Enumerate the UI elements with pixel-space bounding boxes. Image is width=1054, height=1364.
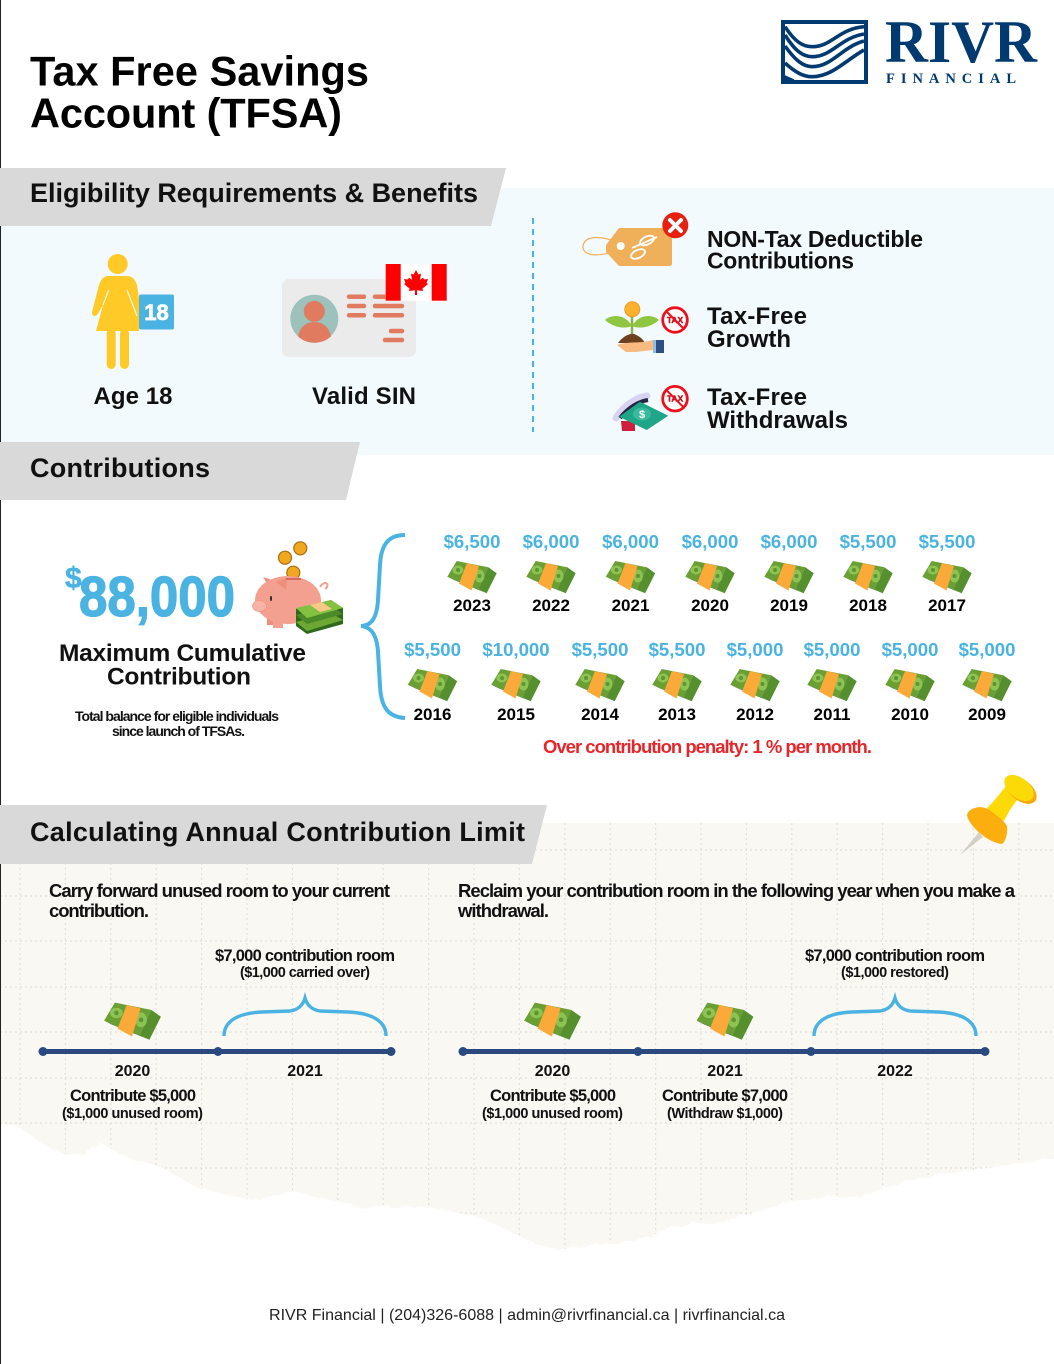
callout: 2021 room (215, 947, 395, 981)
year 2016 (404, 639, 461, 724)
year 2019: $6,000 (761, 531, 817, 552)
stat: 88,000: 88,000 (79, 565, 235, 629)
year 2017: 2017 (928, 596, 966, 615)
left page edge (0, 0, 1, 1364)
logo subtitle: FINANCIAL (886, 71, 1016, 87)
logo: RIVR Financial (783, 9, 1038, 87)
year 2009: 2009 (968, 705, 1006, 724)
timeline labels (62, 1063, 323, 1122)
text: tax-free growth: Growth (707, 326, 791, 353)
text: total balance note: since launch of TFSAs. (112, 723, 245, 739)
year 2013: $5,500 (649, 639, 705, 660)
timeline bar (458, 1047, 990, 1056)
text: maximum cumulative contribution: Maximum Cumulative (59, 640, 306, 667)
timeline labels: Contribute $5,000 (490, 1087, 616, 1105)
icon: ID card with flag (282, 264, 447, 357)
text: tax-free growth (707, 303, 807, 353)
icon: push pin (960, 770, 1042, 855)
callout: 2022 room: ($1,000 restored) (841, 965, 949, 981)
callout: 2022 room: $7,000 contribution room (805, 947, 985, 965)
year 2016: $5,500 (404, 639, 461, 660)
year 2023 (444, 531, 500, 615)
year 2018 (840, 531, 896, 615)
year 2010: 2010 (891, 705, 929, 724)
text: non-tax deductible: NON-Tax Deductible (707, 226, 923, 252)
year 2018: $5,500 (840, 531, 896, 552)
year 2009: $5,000 (959, 639, 1015, 660)
icon: money 2020 (524, 1003, 581, 1040)
text: maximum cumulative contribution: Contribution (107, 664, 251, 690)
heading: calculating annual contribution limit (0, 805, 547, 864)
year 2020 (682, 531, 738, 615)
text: total balance note (75, 708, 279, 739)
year 2010 (882, 639, 938, 724)
timeline: reclaim (458, 947, 990, 1122)
text: tax-free growth: Tax-Free (707, 303, 807, 330)
year 2011: $5,000 (804, 639, 860, 660)
year 2011: 2011 (814, 705, 850, 724)
timeline labels: 2021 (287, 1063, 323, 1080)
icon: money 2020 (104, 1003, 161, 1040)
year 2015 (482, 639, 550, 724)
logo wordmark: RIVR (885, 9, 1038, 75)
footer: RIVR Financial | (204)326-6088 | admin@rivrfinancial.ca | rivrfinancial.ca (269, 1307, 785, 1324)
heading: calculating annual contribution limit: Calculating Annual Contribution Limit (30, 817, 525, 847)
title: Account (TFSA) (30, 90, 342, 136)
year 2014: $5,500 (572, 639, 628, 660)
icon: cash withdrawal (616, 396, 668, 431)
icon: no tax growth (663, 308, 687, 332)
year 2014: 2014 (581, 705, 619, 724)
icon: piggy bank (252, 542, 343, 634)
panel: calculation paper background (0, 823, 1054, 1260)
icon: woman age 18 (92, 254, 174, 369)
year 2017 (919, 531, 975, 615)
timeline labels: (Withdraw $1,000) (667, 1106, 783, 1122)
year 2021: $6,000 (602, 531, 659, 552)
heading: contributions (0, 442, 360, 500)
label: age 18: Age 18 (94, 383, 172, 410)
text: maximum cumulative contribution (59, 640, 306, 690)
callout: 2021 room: $7,000 contribution room (215, 947, 395, 965)
timeline: carry forward (38, 947, 396, 1122)
year 2018: 2018 (849, 596, 887, 615)
year 2022: $6,000 (523, 531, 579, 552)
text: reclaim heading (457, 880, 1016, 921)
brace: 2022 (814, 998, 976, 1036)
year 2015: $10,000 (482, 639, 550, 660)
text: carry forward heading: Carry forward unused room to your current (49, 880, 390, 901)
year 2022: 2022 (532, 596, 570, 615)
panel: eligibility background (0, 188, 1054, 455)
timeline bar (38, 1047, 396, 1056)
year 2012 (727, 639, 783, 724)
timeline labels: ($1,000 unused room) (62, 1106, 203, 1122)
year 2011 (804, 639, 860, 724)
callout: 2021 room: ($1,000 carried over) (240, 965, 370, 981)
year 2020: 2020 (691, 596, 729, 615)
year 2013: 2013 (658, 705, 696, 724)
text: carry forward heading (49, 880, 390, 921)
year 2013 (649, 639, 705, 724)
year 2023: $6,500 (444, 531, 500, 552)
logo mark (783, 22, 866, 82)
row: 2023 to 2017 (444, 531, 975, 615)
icon: no tax withdrawal (663, 386, 687, 411)
text: tax-free withdrawals: Withdrawals (707, 407, 848, 434)
text: reclaim heading: withdrawal. (457, 900, 549, 921)
year 2016: 2016 (414, 705, 451, 724)
title: Tax Free Savings (30, 48, 369, 94)
year 2010: $5,000 (882, 639, 938, 660)
timeline labels: Contribute $7,000 (662, 1087, 788, 1105)
icon: cash withdrawal: $ (639, 409, 645, 421)
title (30, 48, 369, 136)
text: non-tax deductible: Contributions (707, 248, 854, 274)
heading: eligibility: Eligibility Requirements & Benefits (30, 178, 478, 208)
icon: woman age 18: 18 (144, 300, 169, 325)
year 2015: 2015 (497, 705, 535, 724)
year 2017: $5,500 (919, 531, 975, 552)
text: reclaim heading: Reclaim your contribution room in the following year when you make a (458, 880, 1016, 901)
icon: percent tag (583, 212, 688, 266)
year 2009 (959, 639, 1015, 724)
text: over contribution penalty: Over contribution penalty: 1 % per month. (543, 736, 872, 757)
brace (361, 535, 405, 718)
year 2023: 2023 (453, 596, 491, 615)
text: tax-free withdrawals (707, 384, 848, 434)
timeline labels (482, 1063, 913, 1122)
divider (532, 218, 534, 432)
year 2021: 2021 (612, 596, 649, 615)
timeline labels: 2021 (707, 1063, 743, 1080)
row: 2016 to 2009 (404, 639, 1015, 724)
timeline labels: 2020 (535, 1063, 570, 1080)
text: non-tax deductible (707, 226, 923, 274)
heading: contributions: Contributions (30, 453, 210, 483)
year 2019 (761, 531, 817, 615)
text: total balance note: Total balance for eligible individuals (75, 708, 279, 724)
icon: plant growth (605, 302, 664, 353)
label: valid SIN: Valid SIN (312, 383, 416, 410)
text: tax-free withdrawals: Tax-Free (707, 384, 807, 411)
year 2019: 2019 (770, 596, 808, 615)
timeline labels: 2022 (877, 1063, 913, 1080)
timeline labels: 2020 (115, 1063, 150, 1080)
year 2012: $5,000 (727, 639, 783, 660)
year 2022 (523, 531, 579, 615)
year 2021 (602, 531, 659, 615)
year 2014 (572, 639, 628, 724)
year 2020: $6,000 (682, 531, 738, 552)
year 2012: 2012 (736, 705, 774, 724)
text: carry forward heading: contribution. (49, 900, 149, 921)
stat: 88,000: $ (65, 562, 82, 595)
timeline labels: Contribute $5,000 (70, 1087, 196, 1105)
callout: 2022 room (805, 947, 985, 981)
timeline labels: ($1,000 unused room) (482, 1106, 623, 1122)
heading: eligibility (0, 168, 506, 226)
brace: 2021 (224, 998, 386, 1036)
icon: money 2021 (697, 1003, 753, 1040)
